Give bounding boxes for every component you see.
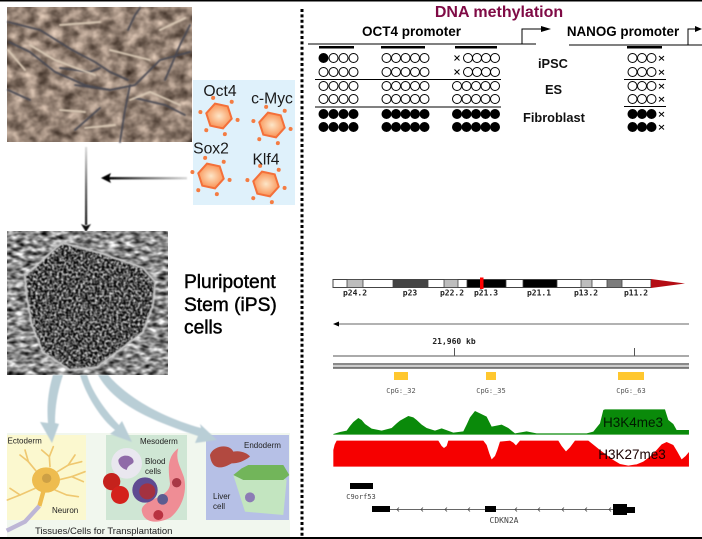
methylation table: NANOG [624,46,666,132]
divider: vertical dotted [300,9,304,539]
icon: Oct4 hexagon [195,94,243,138]
factor labels [193,83,293,168]
mesoderm panel: Blood [145,457,165,466]
gene: CDKN2A: CDKN2A [490,516,519,525]
factor labels: Oct4 [203,83,237,100]
ES rows [319,82,500,104]
band labels: p13.2 [574,288,598,298]
panel: tissues and cells for transplantation [7,433,290,537]
amplicon bars [319,46,497,48]
endoderm panel: Liver [213,492,231,501]
endoderm panel: Endoderm [244,441,281,450]
row labels [523,56,586,125]
promoter heading: OCT4 [308,24,551,44]
icon: blood cells [103,448,185,522]
track: H3K4me3 [333,409,689,435]
panel: reprogramming factors [187,80,296,206]
iPSC rows [319,54,500,76]
endoderm panel [206,435,289,520]
icon: Klf4 hexagon [242,162,290,206]
factor labels: c-Myc [251,90,293,108]
ectoderm panel: Neuron [52,506,78,515]
CpG islands track: CpG:_35 [476,387,506,395]
heading: DNA methylation: DNA methylation [435,4,563,21]
photo: fibroblast cells [7,7,192,142]
band labels: p11.2 [624,288,648,298]
row labels: iPSC [538,56,568,71]
gene: C9orf53 [346,483,376,501]
row labels: Fibroblast [523,110,586,125]
CpG islands track: CpG:_32 [386,387,416,395]
mesoderm panel: Mesoderm [140,437,178,446]
photo: iPS colony [7,231,168,375]
top border [0,0,702,2]
band labels: p22.2 [440,288,464,298]
promoter heading: NANOG: NANOG promoter [567,24,680,39]
band labels: p21.3 [474,288,498,298]
row labels: ES [545,82,563,97]
promoter heading: NANOG [567,24,702,45]
CpG islands track: CpG:_63 [616,387,646,395]
arrows: differentiation [40,375,217,443]
genomic ruler [333,337,689,368]
track: H3K27me3: H3K27me3 [598,447,666,462]
track: H3K4me3: H3K4me3 [603,415,663,430]
band labels: p24.2 [343,288,367,298]
band labels: p23 [403,288,417,298]
methylation table: OCT4 [315,46,501,132]
ectoderm panel [7,435,86,531]
caption: Tissues/Cells for Transplantation [35,526,172,537]
genomic ruler: 21,960 kb [432,337,476,346]
strand arrow [333,322,689,326]
heading: Pluripotent Stem (iPS) cells: cells [184,318,222,338]
heading: Pluripotent Stem (iPS) cells: Pluripotent [184,272,276,293]
gene: C9orf53: C9orf53 [346,493,376,501]
gene: CDKN2A [372,504,635,525]
icon: Sox2 hexagon [187,154,235,198]
factor labels: Sox2 [193,140,229,158]
mesoderm panel: cells [145,467,161,476]
arrow: fibroblast to colony [81,147,91,232]
band labels [343,288,648,298]
endoderm panel: cell [213,502,225,511]
icon: neuron [7,447,85,531]
arrow: factors to reprogramming line [101,173,187,183]
chromosome ideogram [333,278,685,298]
mesoderm panel [103,435,187,522]
promoter heading: OCT4: OCT4 promoter [362,24,462,39]
icon: liver and liver cell [210,446,289,515]
icon: c-Myc hexagon [248,103,296,147]
heading: Pluripotent Stem (iPS) cells [184,272,277,338]
fibroblast rows [318,109,500,132]
CpG islands track [386,372,646,395]
band labels: p21.1 [527,288,551,298]
row dividers [315,80,501,107]
heading: Pluripotent Stem (iPS) cells: Stem (iPS) [184,295,277,316]
bottom border [0,537,702,539]
track: H3K27me3 [333,441,689,467]
ectoderm panel: Ectoderm [8,436,42,446]
factor labels: Klf4 [252,152,280,168]
